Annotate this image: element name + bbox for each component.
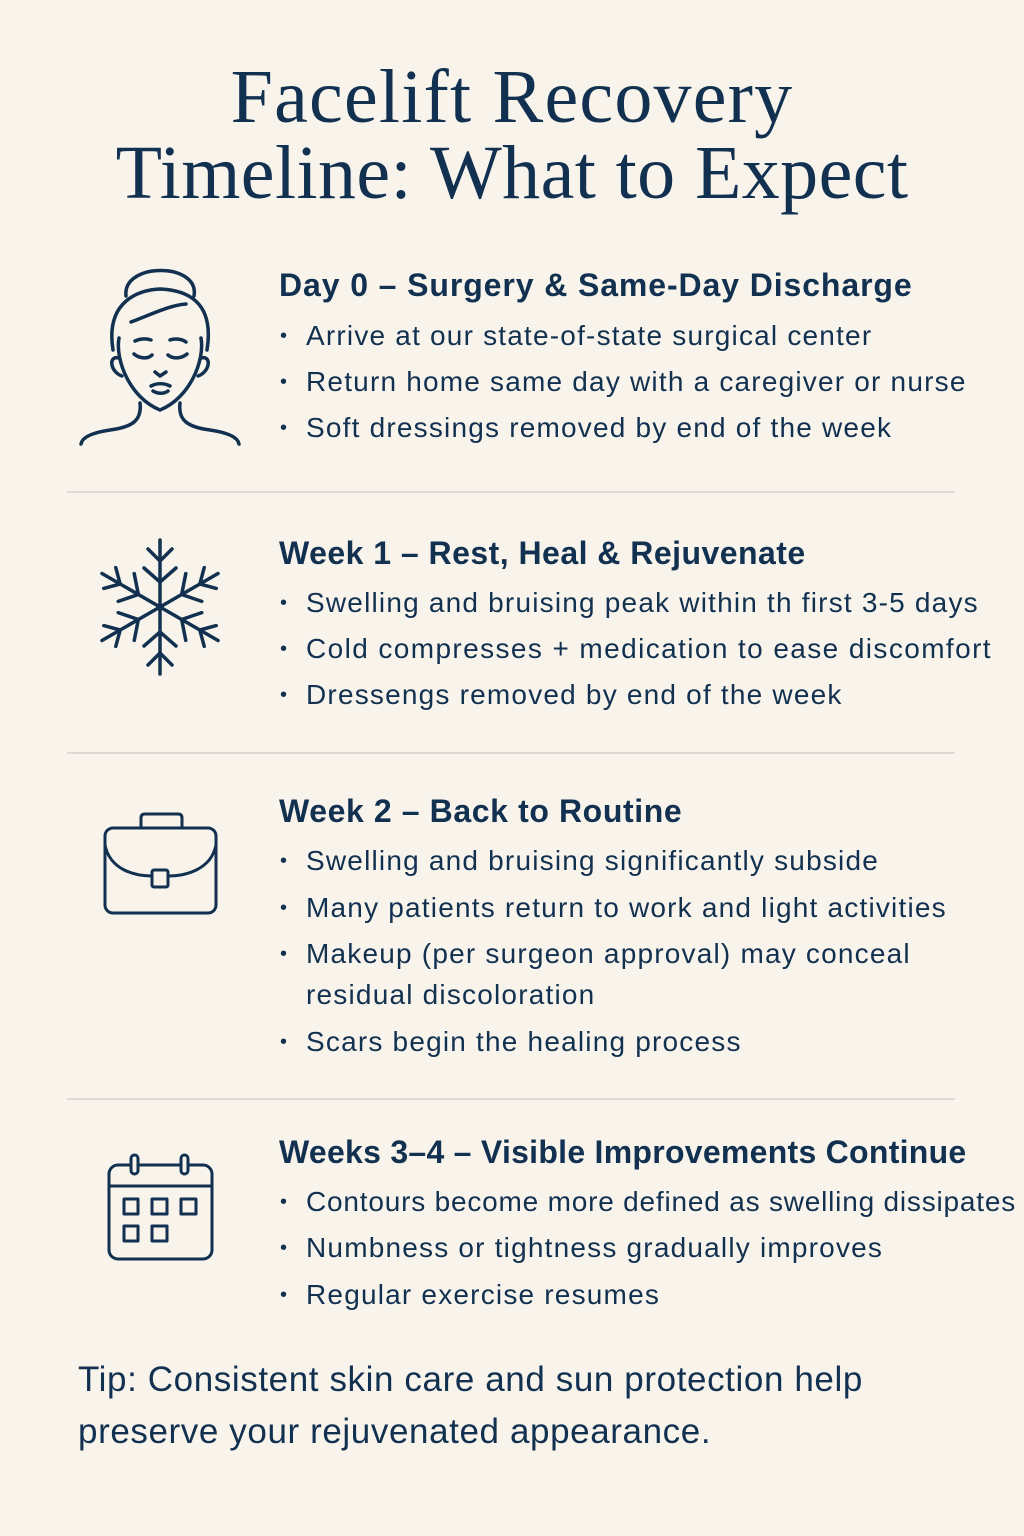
bullets: weeks 3-4: Numbness or tightness gradually improves <box>306 1232 883 1263</box>
bullets: day 0: Arrive at our state-of-state surgical center <box>306 320 872 351</box>
bullets: week 1 <box>280 587 992 710</box>
bullets: week 1: Dressengs removed by end of the week <box>306 679 843 710</box>
bullets: week 2 <box>280 845 947 1057</box>
title: Facelift Recovery <box>231 55 793 139</box>
icon: briefcase <box>105 814 216 913</box>
section: day 0 <box>279 267 967 443</box>
icon: calendar <box>109 1155 212 1259</box>
bullets: day 0: Soft dressings removed by end of the week <box>306 412 892 443</box>
icon: face with hair bun <box>81 270 239 444</box>
bullets: week 1: Cold compresses + medication to ease discomfort <box>306 633 992 664</box>
title <box>116 55 908 215</box>
bullets: day 0: Return home same day with a caregiver or nurse <box>306 366 967 397</box>
icon: snowflake <box>94 540 226 674</box>
bullets: weeks 3-4: Contours become more defined as swelling dissipates <box>306 1186 1016 1217</box>
bullets: week 2: Swelling and bruising significantly subside <box>306 845 879 876</box>
bullets: weeks 3-4 <box>280 1186 1016 1310</box>
heading: day 0: Day 0 – Surgery & Same-Day Discharge <box>279 267 913 303</box>
bullets: week 2: Scars begin the healing process <box>306 1026 742 1057</box>
heading: weeks 3-4: Weeks 3–4 – Visible Improvements Continue <box>279 1134 966 1170</box>
bullets: week 2: Many patients return to work and light activities <box>306 892 947 923</box>
bullets: day 0 <box>280 320 967 443</box>
bullets: week 2: residual discoloration <box>306 979 595 1010</box>
bullets: week 2: Makeup (per surgeon approval) may conceal <box>306 938 911 969</box>
tip: Tip: Consistent skin care and sun protection help <box>78 1360 863 1399</box>
tip <box>78 1360 863 1451</box>
title: Timeline: What to Expect <box>116 131 908 215</box>
section: week 1 <box>279 535 992 710</box>
bullets: week 1: Swelling and bruising peak within th first 3-5 days <box>306 587 979 618</box>
section: week 2 <box>279 793 947 1057</box>
section: weeks 3-4 <box>279 1134 1016 1310</box>
heading: week 2: Week 2 – Back to Routine <box>279 793 682 829</box>
bullets: weeks 3-4: Regular exercise resumes <box>306 1279 660 1310</box>
tip: preserve your rejuvenated appearance. <box>78 1412 711 1451</box>
heading: week 1: Week 1 – Rest, Heal & Rejuvenate <box>279 535 806 571</box>
